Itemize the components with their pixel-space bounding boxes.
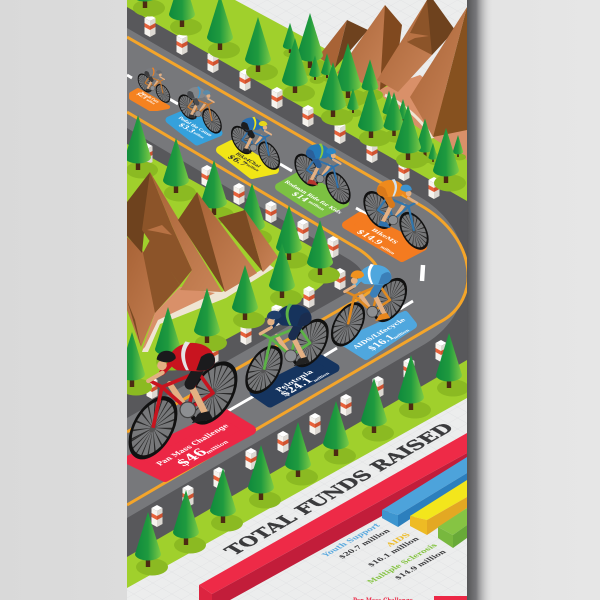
- top right mountains: [318, 0, 467, 160]
- legend: Youth Support: [319, 522, 392, 560]
- label: $3.3: [176, 121, 198, 134]
- cyclist: [179, 86, 221, 137]
- category name: AIDS: [383, 531, 413, 549]
- pad: [131, 90, 168, 109]
- label: million: [145, 98, 157, 105]
- panel drop shadow: [467, 0, 493, 600]
- panel: AIDS/Lifecycle: [332, 264, 413, 356]
- upper road bollards: [144, 15, 440, 199]
- category name: Youth Support: [319, 522, 383, 559]
- title: TOTAL FUNDS RAISED: [220, 420, 459, 559]
- infographic panel: [119, 0, 469, 600]
- category name: Multiple Sclerosis: [365, 542, 439, 585]
- road: dark curb band: [127, 7, 467, 557]
- bar: Pan Mass Challenge red: [199, 433, 467, 600]
- label: $24.1: [277, 376, 316, 399]
- cyclist: [364, 179, 428, 255]
- legend: Multiple Sclerosis: [365, 542, 448, 585]
- trees: lower strip: [135, 333, 469, 576]
- label: BikeMS: [369, 228, 399, 245]
- label: million: [192, 131, 206, 139]
- bottom red block: [434, 596, 467, 600]
- legend: AIDS: [365, 531, 421, 568]
- panel: Tour de Cure: [131, 68, 170, 109]
- amount: $16.1 million: [365, 535, 421, 568]
- road: inner yellow line: [127, 112, 379, 432]
- label: AIDS/Lifecycle: [350, 317, 408, 351]
- inner grass island: [127, 144, 330, 380]
- label: million: [392, 328, 411, 340]
- road: curved dash: [422, 265, 423, 281]
- pad: [346, 216, 423, 258]
- paper background: [127, 0, 467, 600]
- label: [356, 228, 398, 254]
- bar: Multiple Sclerosis green: [438, 508, 467, 548]
- label: million: [307, 200, 326, 211]
- label: Pelotonia: [273, 368, 316, 393]
- cyclist: [246, 303, 328, 400]
- label: Tour de Cure: [139, 91, 161, 104]
- label: [228, 152, 261, 172]
- panel: Pan Mass Challenge: [130, 341, 251, 477]
- bar chart: total funds raised: [199, 433, 467, 600]
- inner island bollards: [142, 143, 346, 399]
- trees: lower island: [119, 243, 302, 396]
- label: million: [379, 245, 397, 255]
- label: [273, 368, 331, 399]
- pad: [279, 174, 345, 214]
- panel: BikeMS: [346, 179, 428, 258]
- pad: [220, 144, 275, 175]
- label: million: [245, 163, 260, 172]
- panel: Rodman Ride for Kids: [279, 143, 350, 215]
- amount: $20.7 million: [336, 527, 392, 560]
- trees: behind left mountains: [125, 115, 340, 284]
- cyclist: [232, 117, 279, 173]
- pad: [130, 414, 251, 477]
- left mountains: [127, 172, 278, 352]
- label: $16.1: [365, 333, 398, 353]
- road: white lane dashes: [127, 75, 413, 411]
- label: Pedal the Cause: [176, 116, 214, 138]
- lower grass strip: [127, 355, 467, 588]
- label: $14: [289, 190, 312, 203]
- lower road bollards: [152, 340, 446, 527]
- road: asphalt surface: [127, 28, 466, 518]
- cyclist: [295, 143, 350, 208]
- label: Bike4Chai: [233, 152, 262, 169]
- upper grass field: [127, 0, 467, 210]
- pad: [344, 315, 413, 356]
- label: million: [205, 440, 231, 455]
- label: $14.9: [353, 228, 385, 247]
- cyclist: [332, 264, 406, 352]
- bar: AIDS yellow: [410, 480, 467, 535]
- label: Pan Mass Challenge: [154, 422, 231, 467]
- label: Rodman Ride for Kids: [282, 180, 343, 215]
- trees: upper field: [132, 0, 466, 192]
- pad: [169, 112, 219, 142]
- pad: [254, 359, 335, 403]
- label: million: [312, 371, 331, 383]
- road: outer yellow line: [127, 37, 468, 505]
- bar: Youth Support blue: [382, 457, 467, 527]
- panel: Pelotonia: [246, 303, 335, 403]
- label: $2.4: [134, 91, 149, 100]
- label: [136, 92, 159, 104]
- cyclist: [138, 68, 170, 105]
- label: $6.7: [225, 153, 250, 168]
- panel: Pedal the Cause: [169, 86, 221, 142]
- amount: $14.9 million: [392, 548, 448, 581]
- cyclist: [130, 341, 236, 467]
- label: $46: [173, 446, 212, 469]
- panel: Bike4Chai: [220, 117, 279, 175]
